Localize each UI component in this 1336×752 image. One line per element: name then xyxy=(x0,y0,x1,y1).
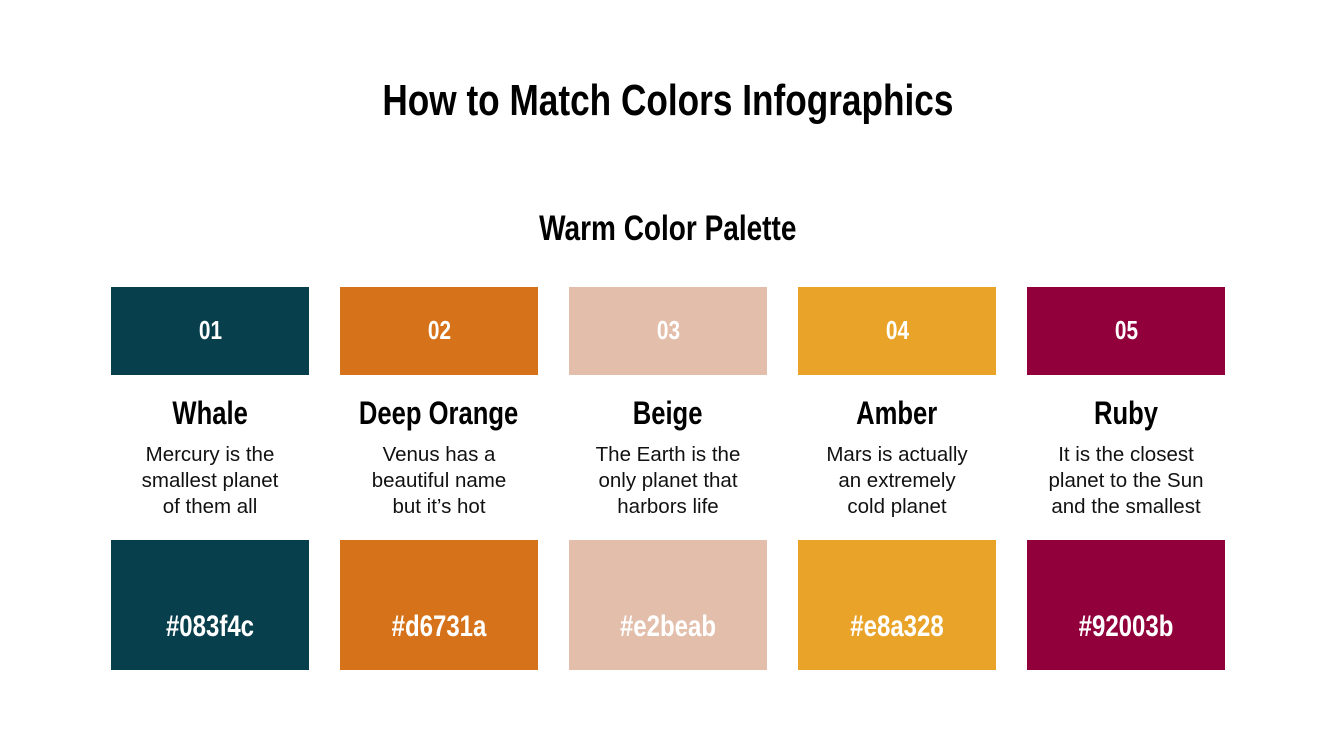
description ruby: planet to the Sun xyxy=(1048,469,1204,492)
description whale: of them all xyxy=(163,495,257,518)
description deep orange: but it’s hot xyxy=(392,495,486,518)
description ruby: and the smallest xyxy=(1051,495,1201,518)
panel: whale xyxy=(111,287,309,670)
panel: ruby xyxy=(1027,287,1225,670)
description deep orange: beautiful name xyxy=(372,469,506,492)
description beige: The Earth is the xyxy=(596,443,740,466)
number box 03 xyxy=(569,287,767,375)
description deep orange: Venus has a xyxy=(383,443,495,466)
number box 02 xyxy=(340,287,538,375)
description amber: an extremely xyxy=(838,469,956,492)
name beige: Beige xyxy=(633,395,703,431)
description beige xyxy=(596,443,740,518)
hex box beige xyxy=(569,540,767,670)
description ruby xyxy=(1048,443,1204,518)
panel: deep orange xyxy=(340,287,538,670)
hex box amber: #e8a328 xyxy=(850,610,944,643)
description beige: harbors life xyxy=(617,495,719,518)
panel: amber xyxy=(798,287,996,670)
name whale: Whale xyxy=(172,395,248,431)
description beige: only planet that xyxy=(598,469,738,492)
hex box whale: #083f4c xyxy=(166,610,254,643)
name ruby: Ruby xyxy=(1094,395,1158,431)
description whale: smallest planet xyxy=(142,469,278,492)
hex box deep orange xyxy=(340,540,538,670)
hex box ruby xyxy=(1027,540,1225,670)
name amber: Amber xyxy=(856,395,938,431)
subtitle: Warm Color Palette xyxy=(539,209,797,248)
hex box whale xyxy=(111,540,309,670)
number box 04: 04 xyxy=(885,315,909,345)
description amber xyxy=(826,443,968,518)
description whale: Mercury is the xyxy=(146,443,274,466)
number box 01: 01 xyxy=(198,315,222,345)
description ruby: It is the closest xyxy=(1058,443,1194,466)
title: How to Match Colors Infographics xyxy=(382,76,954,125)
hex box deep orange: #d6731a xyxy=(392,610,486,643)
number box 05: 05 xyxy=(1114,315,1138,345)
hex box beige: #e2beab xyxy=(620,610,716,643)
description whale xyxy=(142,443,278,518)
number box 01 xyxy=(111,287,309,375)
name deep orange: Deep Orange xyxy=(359,395,519,431)
hex box amber xyxy=(798,540,996,670)
hex box ruby: #92003b xyxy=(1079,610,1173,643)
number box 04 xyxy=(798,287,996,375)
panel: beige xyxy=(569,287,767,670)
number box 02: 02 xyxy=(427,315,451,345)
description deep orange xyxy=(372,443,506,518)
description amber: cold planet xyxy=(847,495,947,518)
number box 03: 03 xyxy=(656,315,680,345)
description amber: Mars is actually xyxy=(826,443,968,466)
number box 05 xyxy=(1027,287,1225,375)
